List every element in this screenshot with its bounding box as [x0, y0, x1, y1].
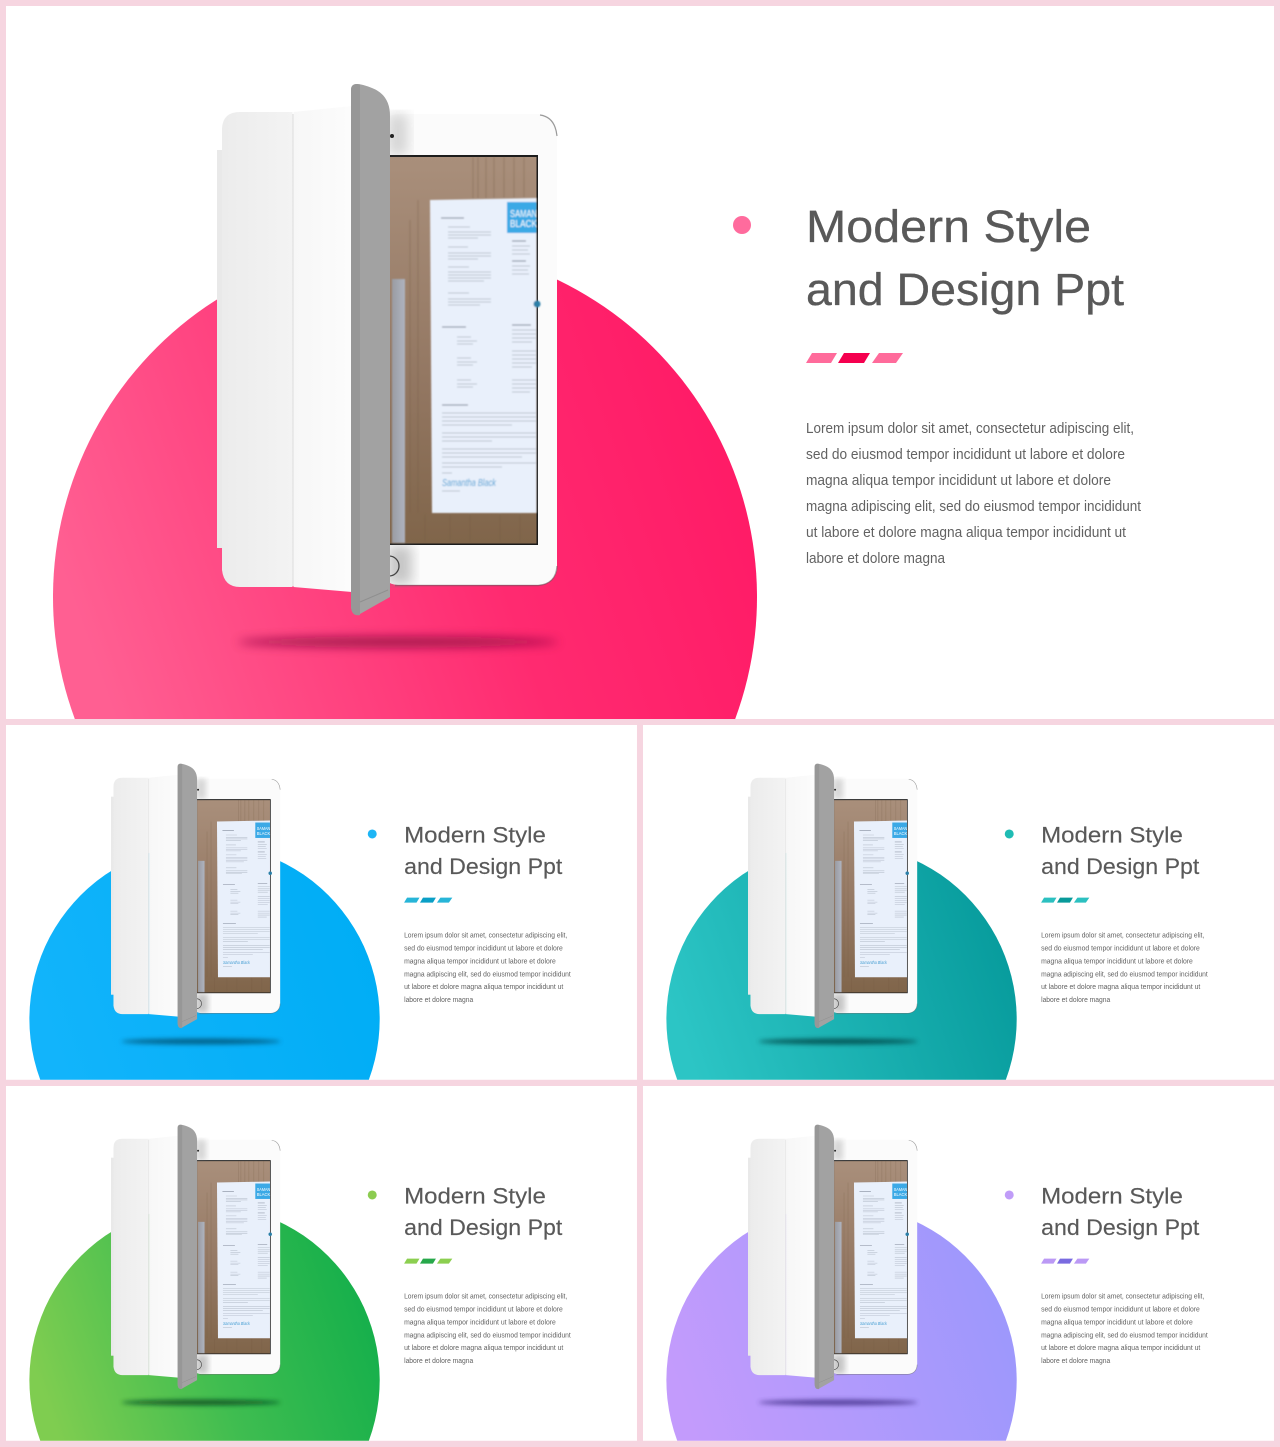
panel: blue slide [6, 725, 637, 1080]
floating shadow [758, 1400, 918, 1405]
body text: Lorem ipsum dolor sit amet, consectetur adipiscing elit, [806, 421, 1134, 437]
heading: Modern Style [1041, 822, 1183, 847]
body text [404, 930, 571, 1004]
heading [806, 201, 1124, 315]
body text [1041, 1291, 1208, 1365]
bullet dot [1005, 1190, 1014, 1199]
body text: sed do eiusmod tempor incididunt ut labore et dolore [1041, 1304, 1200, 1313]
panel: teal slide [643, 725, 1274, 1080]
body text: sed do eiusmod tempor incididunt ut labore et dolore [1041, 943, 1200, 952]
body text: Lorem ipsum dolor sit amet, consectetur adipiscing elit, [404, 930, 567, 939]
body text: labore et dolore magna [1041, 995, 1110, 1004]
body text: sed do eiusmod tempor incididunt ut labore et dolore [404, 943, 563, 952]
body text: sed do eiusmod tempor incididunt ut labore et dolore [806, 447, 1125, 463]
body text [404, 1291, 571, 1365]
heading: Modern Style [404, 822, 546, 847]
floating shadow [238, 636, 558, 648]
floating shadow [121, 1039, 281, 1044]
body text: magna aliqua tempor incididunt ut labore et dolore [1041, 956, 1193, 965]
tablet mockup [748, 764, 917, 1028]
tablet mockup [217, 84, 557, 615]
bullet dot [368, 1190, 377, 1199]
body text: magna aliqua tempor incididunt ut labore et dolore [404, 1317, 556, 1326]
body text: Lorem ipsum dolor sit amet, consectetur adipiscing elit, [1041, 930, 1204, 939]
bullet dot [368, 829, 377, 838]
slide background [643, 725, 1274, 1080]
panel: green slide [6, 1086, 637, 1441]
bullet dot [1005, 829, 1014, 838]
body text: ut labore et dolore magna aliqua tempor incididunt ut [1041, 982, 1200, 991]
tablet mockup [111, 1125, 280, 1389]
slide background [6, 725, 637, 1080]
heading: Modern Style [806, 201, 1091, 252]
body text [1041, 930, 1208, 1004]
tablet mockup [748, 1125, 917, 1389]
heading: and Design Ppt [404, 854, 563, 879]
heading: and Design Ppt [1041, 854, 1200, 879]
gradient circle [29, 844, 380, 1080]
panel: large pink slide [6, 6, 1274, 719]
body text [806, 421, 1141, 567]
gradient circle [53, 245, 757, 719]
body text: labore et dolore magna [806, 551, 946, 567]
body text: magna adipiscing elit, sed do eiusmod tempor incididunt [404, 969, 571, 978]
body text: labore et dolore magna [404, 995, 473, 1004]
body text: magna aliqua tempor incididunt ut labore et dolore [404, 956, 556, 965]
dash accent [404, 898, 452, 903]
slide background [643, 1086, 1274, 1441]
body text: sed do eiusmod tempor incididunt ut labore et dolore [404, 1304, 563, 1313]
body text: magna adipiscing elit, sed do eiusmod tempor incididunt [806, 499, 1141, 515]
body text: labore et dolore magna [1041, 1356, 1110, 1365]
slide background [6, 1086, 637, 1441]
heading [404, 822, 563, 879]
body text: magna adipiscing elit, sed do eiusmod tempor incididunt [1041, 969, 1208, 978]
bullet dot [733, 216, 751, 234]
body text: ut labore et dolore magna aliqua tempor incididunt ut [404, 1343, 563, 1352]
dash accent [1041, 1259, 1089, 1264]
heading: Modern Style [1041, 1183, 1183, 1208]
heading [404, 1183, 563, 1240]
dash accent [404, 1259, 452, 1264]
body text: ut labore et dolore magna aliqua tempor incididunt ut [1041, 1343, 1200, 1352]
body text: ut labore et dolore magna aliqua tempor incididunt ut [806, 525, 1126, 541]
body text: labore et dolore magna [404, 1356, 473, 1365]
heading: and Design Ppt [404, 1215, 563, 1240]
body text: magna adipiscing elit, sed do eiusmod tempor incididunt [1041, 1330, 1208, 1339]
dash accent [806, 353, 903, 363]
gradient circle [29, 1205, 380, 1441]
body text: magna aliqua tempor incididunt ut labore et dolore [1041, 1317, 1193, 1326]
dash accent [1041, 898, 1089, 903]
heading [1041, 822, 1200, 879]
gradient circle [666, 1205, 1017, 1441]
body text: magna aliqua tempor incididunt ut labore et dolore [806, 473, 1111, 489]
body text: Lorem ipsum dolor sit amet, consectetur adipiscing elit, [404, 1291, 567, 1300]
slide background [6, 6, 1274, 719]
floating shadow [121, 1400, 281, 1405]
heading: and Design Ppt [806, 264, 1124, 315]
tablet mockup [111, 764, 280, 1028]
heading [1041, 1183, 1200, 1240]
heading: Modern Style [404, 1183, 546, 1208]
body text: Lorem ipsum dolor sit amet, consectetur adipiscing elit, [1041, 1291, 1204, 1300]
body text: magna adipiscing elit, sed do eiusmod tempor incididunt [404, 1330, 571, 1339]
panel: purple slide [643, 1086, 1274, 1441]
body text: ut labore et dolore magna aliqua tempor incididunt ut [404, 982, 563, 991]
heading: and Design Ppt [1041, 1215, 1200, 1240]
floating shadow [758, 1039, 918, 1044]
gradient circle [666, 844, 1017, 1080]
